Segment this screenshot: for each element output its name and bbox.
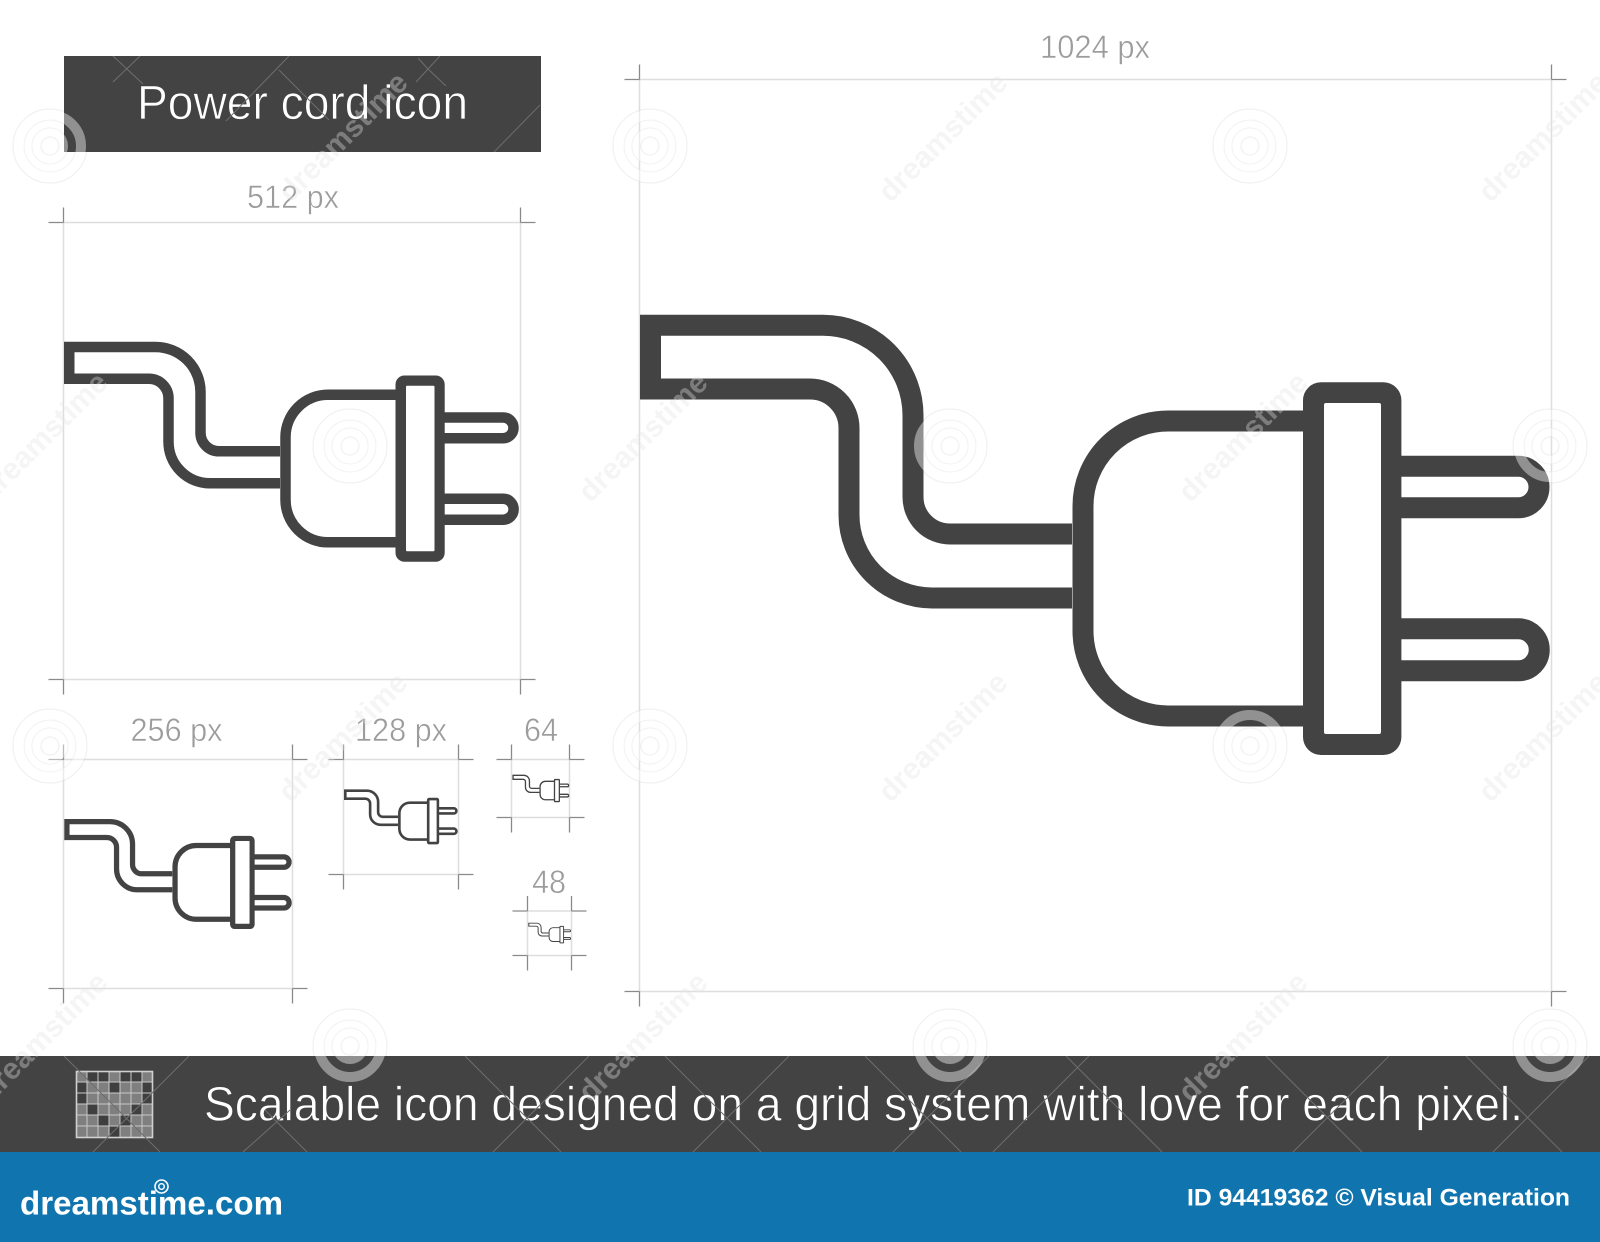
image id and credit: ID 94419362 © Visual Generation [1187, 1184, 1570, 1212]
size guide: 256 px [48, 712, 308, 1004]
watermark spirals on dark shapes [19, 115, 1581, 1077]
size guide: 128 px: 128 px [355, 712, 447, 748]
size guide: 1024 px: 1024 px [1040, 29, 1150, 65]
diagonal watermark text: dreamstime [872, 666, 1014, 808]
watermark spirals on white [13, 109, 1587, 1083]
diagonal watermark text: dreamstime [272, 666, 414, 808]
size guide: 512 px [48, 179, 536, 694]
diagonal watermark text: dreamstime [272, 66, 414, 208]
icon: power cord 48 px [529, 923, 571, 943]
icon: power cord 256 px [67, 822, 289, 929]
footer bar [0, 1152, 1600, 1242]
icon: power cord 1024 px [650, 325, 1539, 755]
size guide: 64: 64 [524, 712, 558, 748]
icon: pixel grid [76, 1071, 153, 1138]
size guide: 48: 48 [532, 864, 566, 900]
diagonal watermark text: dreamstime [572, 366, 714, 508]
icon: power cord 64 px [513, 775, 569, 802]
title text: Power cord icon [137, 77, 468, 130]
size guide: 256 px: 256 px [130, 712, 222, 748]
band text: Scalable icon designed on a grid system with love for each pixel. [204, 1078, 1523, 1132]
grid system band [0, 1056, 1600, 1152]
title banner [64, 56, 541, 152]
diagonal watermark text: dreamstime [572, 966, 714, 1108]
size guide: 128 px [328, 712, 474, 890]
size guide: 64 [496, 712, 584, 832]
dreamstime logo: dreamstime.com [20, 1184, 283, 1222]
icon: power cord 128 px [345, 791, 456, 844]
diagonal watermark text: dreamstime [872, 66, 1014, 208]
size guide: 512 px: 512 px [247, 179, 339, 215]
diagonal watermark text: dreamstime [1172, 366, 1314, 508]
diagonal watermark text: dreamstime [1172, 966, 1314, 1108]
icon: power cord 512 px [69, 347, 514, 562]
size guide: 48 [512, 864, 586, 970]
